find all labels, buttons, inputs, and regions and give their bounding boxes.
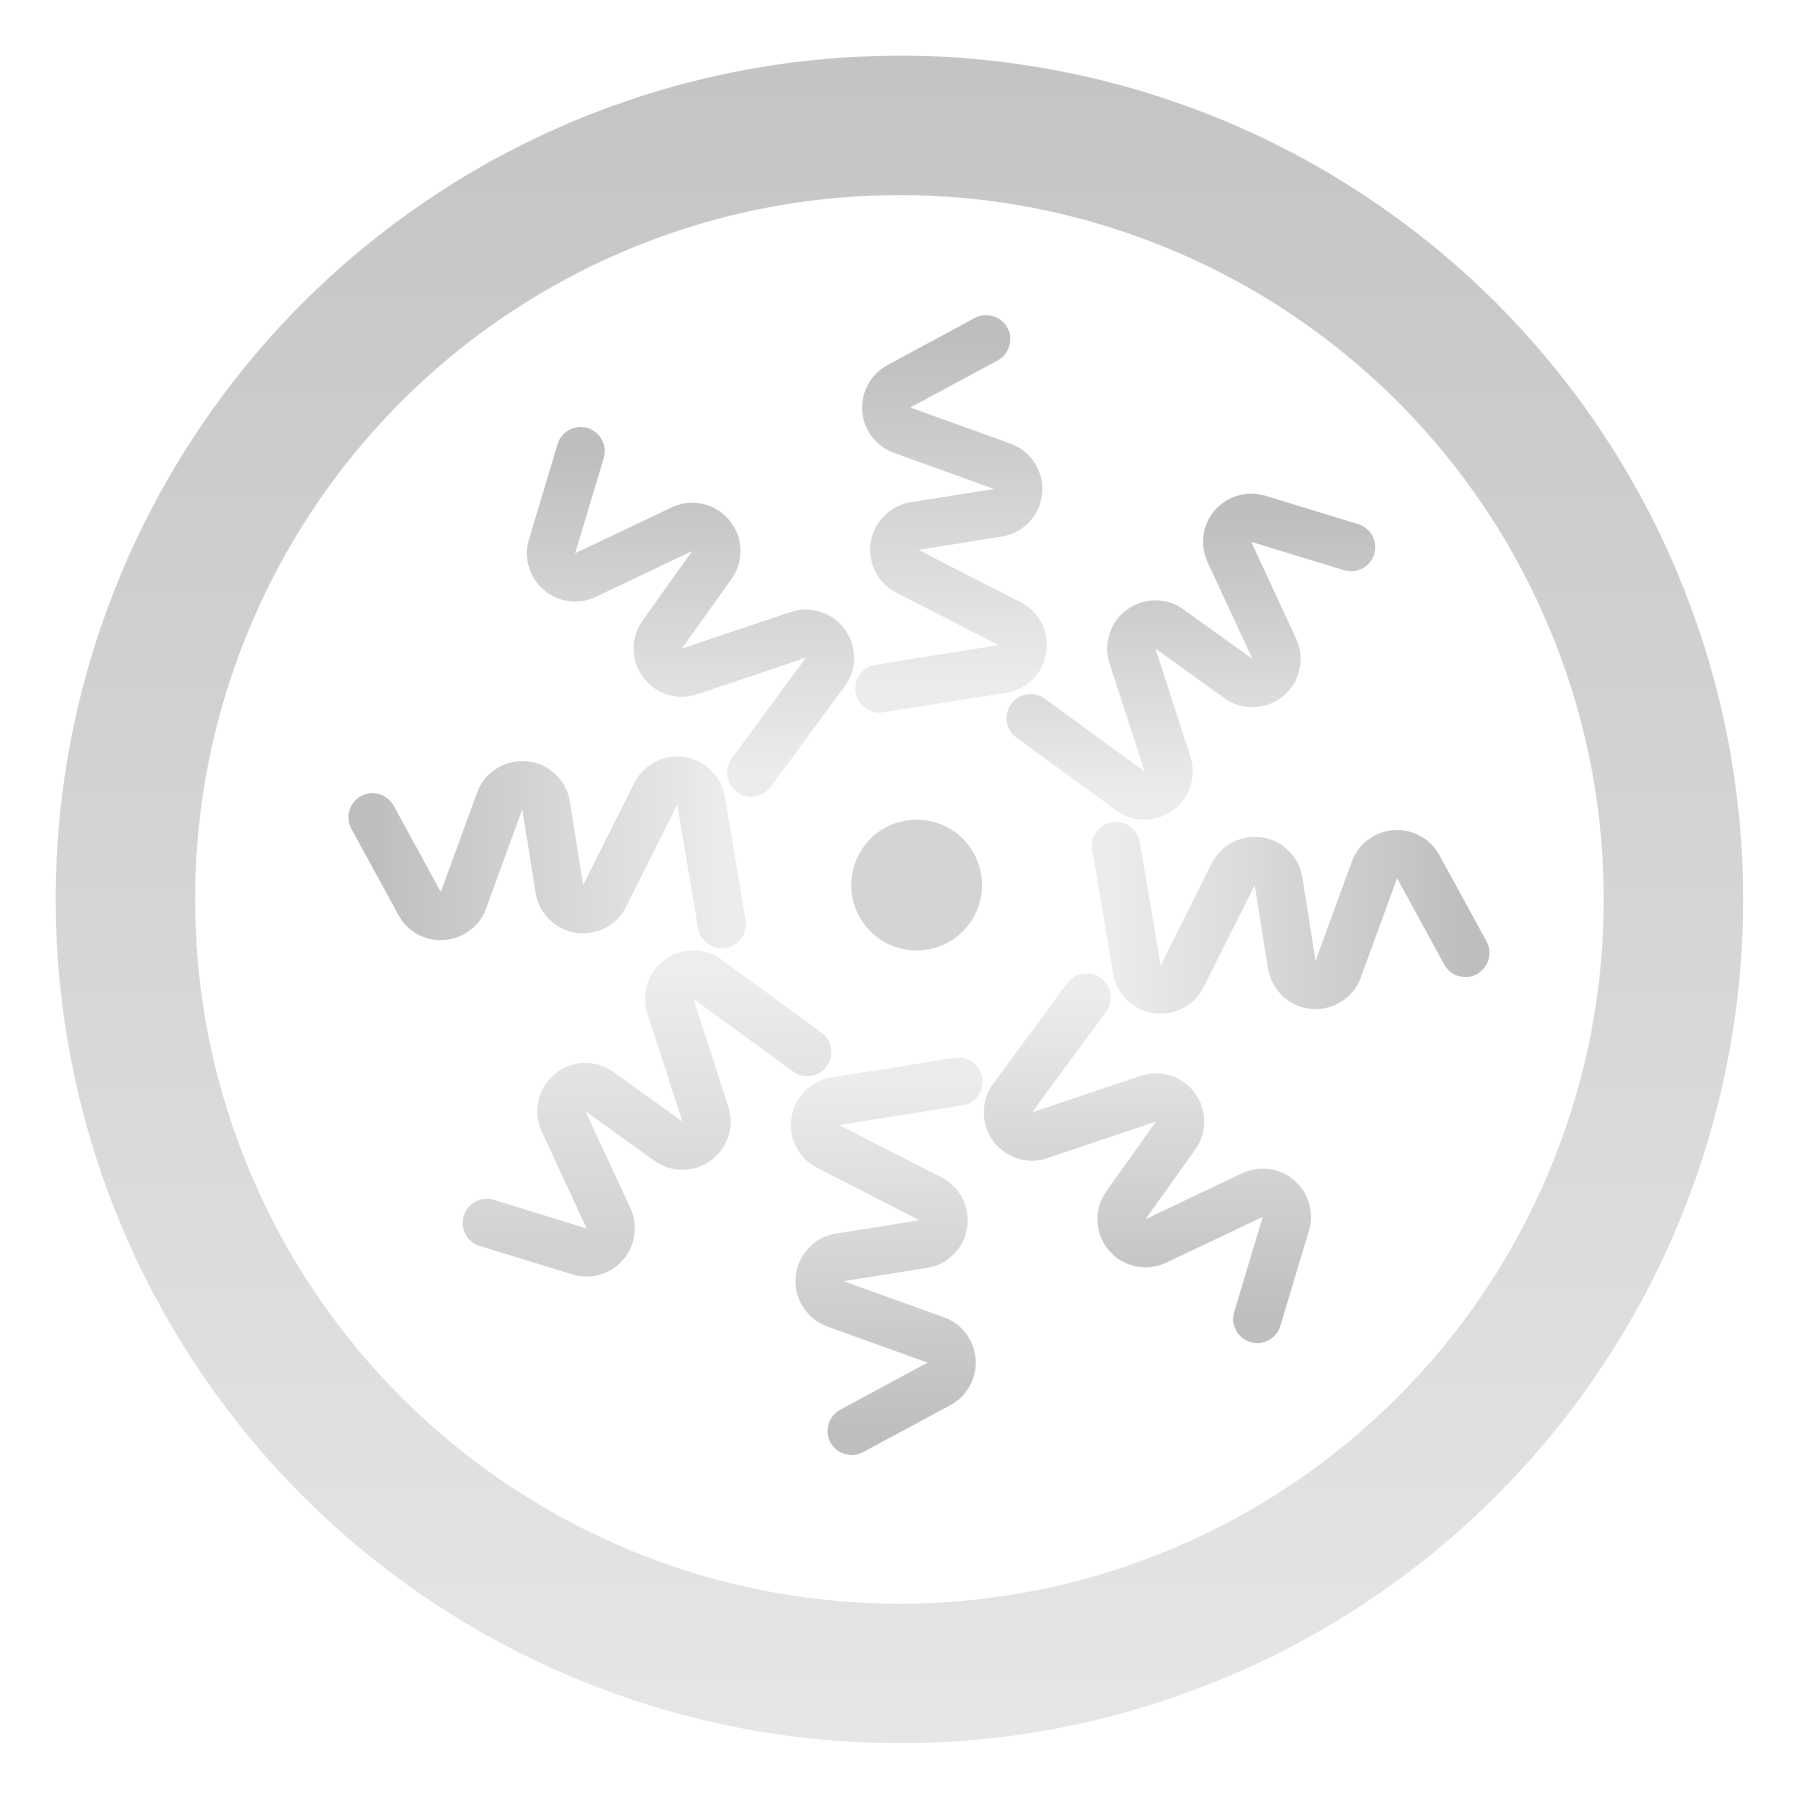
outer ring [125, 125, 1673, 1673]
central dot [851, 820, 982, 951]
wavy strand: upper right [1031, 518, 1351, 796]
wavy strand: bottom [815, 1082, 959, 1431]
wavy strand: top [879, 339, 1023, 689]
wavy strand: right [1116, 846, 1465, 990]
wavy strand: upper left [551, 451, 830, 773]
wavy strand: left [373, 781, 722, 924]
wavy strand: lower right [1008, 997, 1287, 1319]
wavy strand: lower left [487, 975, 807, 1252]
